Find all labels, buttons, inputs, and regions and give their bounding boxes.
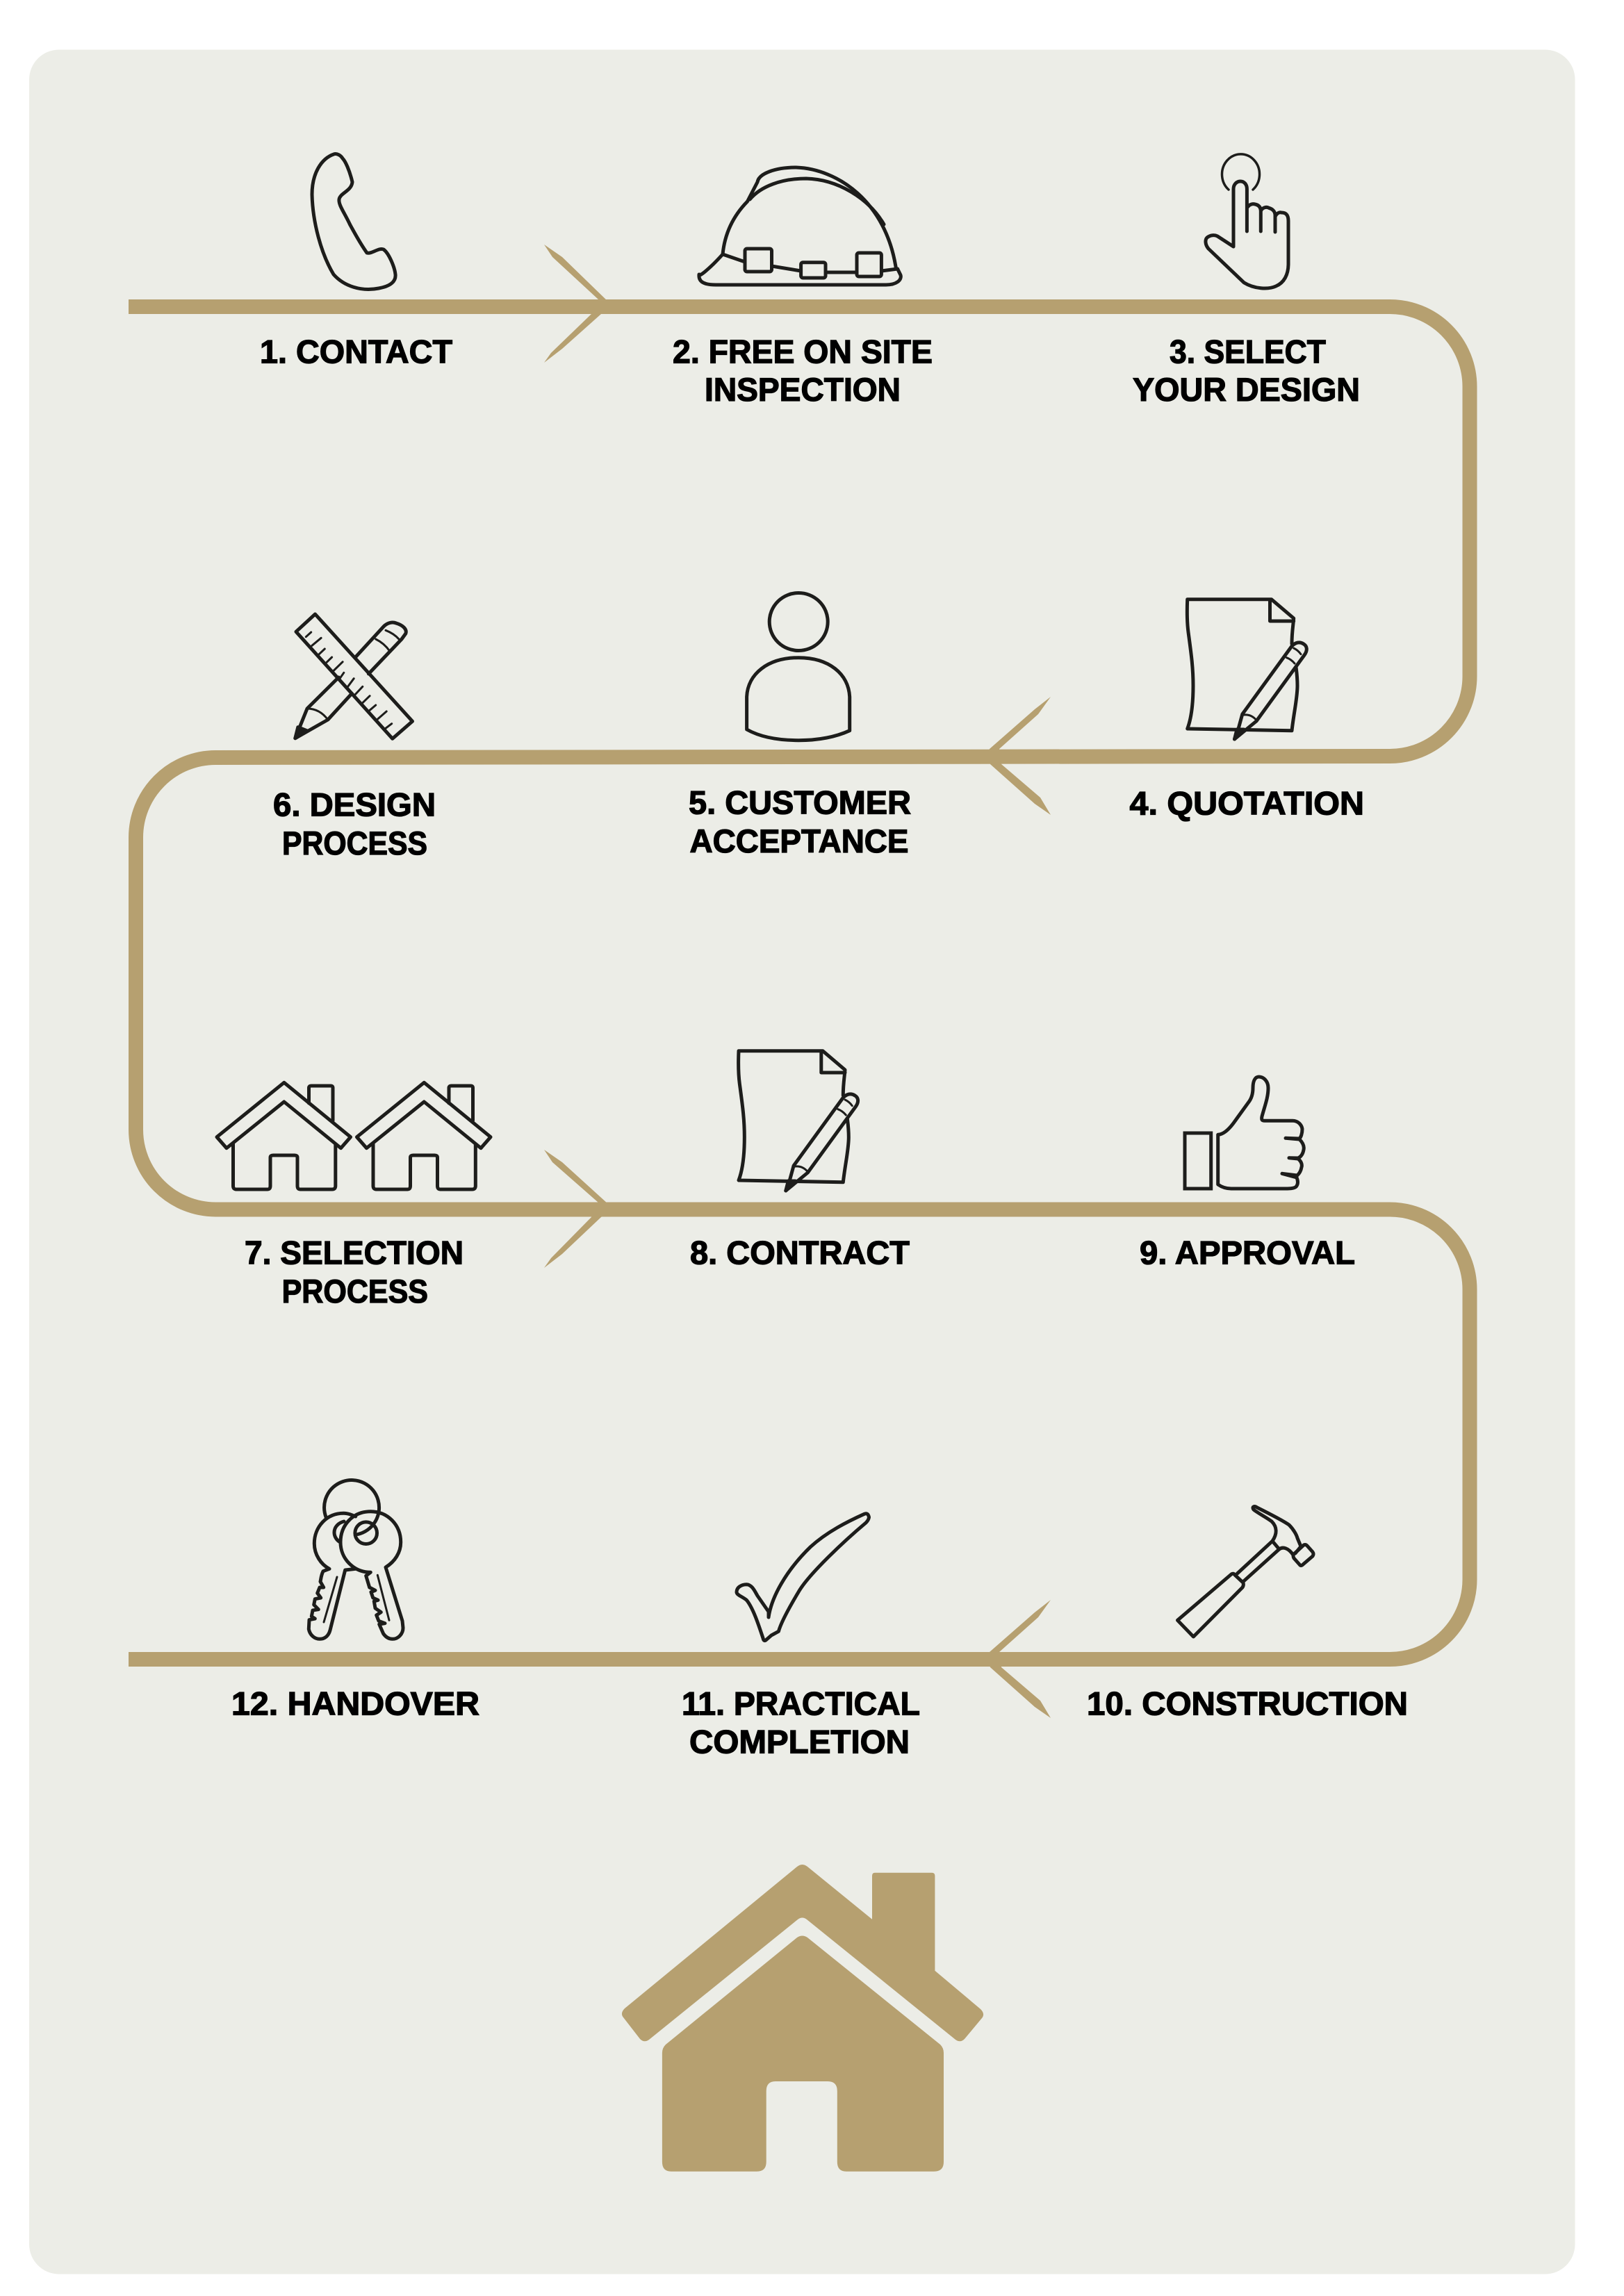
step 1: contact [260,154,452,370]
label: 7. SELECTION PROCESS: 7. SELECTION [245,1234,464,1271]
step 7: selection process [217,1082,491,1310]
label: 2. FREE ON SITE INSPECTION: INSPECTION [705,371,901,408]
label: 2. FREE ON SITE INSPECTION: 2. FREE ON SITE [673,333,933,370]
step 2: free on site inspection [673,167,933,408]
label: 5. CUSTOMER ACCEPTANCE: ACCEPTANCE [689,823,909,859]
icon: paper and pencil [1187,600,1306,739]
label: 3. SELECT YOUR DESIGN [1133,333,1360,408]
step 6: design process [273,614,436,861]
step 4: quotation [1130,600,1364,822]
step 3: select your design [1133,154,1360,408]
icon: paper and pencil [739,1051,858,1191]
label: 10. CONSTRUCTION: 10. CONSTRUCTION [1087,1685,1408,1721]
icon: check mark [737,1514,869,1641]
icon: keys [309,1480,403,1639]
step 9: approval [1140,1077,1355,1271]
label: 6. DESIGN PROCESS: PROCESS [282,825,427,861]
winding process path [129,307,1470,1659]
label: 4. QUOTATION: 4. QUOTATION [1130,785,1364,822]
label: 12. HANDOVER: 12. HANDOVER [231,1685,479,1721]
step 5: customer acceptance [689,593,911,859]
arrow: row 3 pointing right [544,1150,608,1268]
icon: house left [217,1082,350,1189]
icon: thumbs up [1185,1077,1304,1189]
arrow: row 2 pointing left [987,697,1051,815]
icon: hard hat [699,167,901,285]
label: 9. APPROVAL: 9. APPROVAL [1140,1234,1355,1271]
step 10: construction [1087,1507,1408,1721]
label: 6. DESIGN PROCESS [273,786,436,861]
label: 11. PRACTICAL COMPLETION: COMPLETION [689,1723,910,1760]
icon: pointing hand [1206,154,1288,288]
label: 3. SELECT YOUR DESIGN: 3. SELECT [1170,333,1326,370]
label: 8. CONTRACT: 8. CONTRACT [690,1234,910,1271]
label: 11. PRACTICAL COMPLETION: 11. PRACTICAL [682,1685,920,1721]
step 8: contract [690,1051,910,1271]
arrow: row 4 pointing left [987,1600,1051,1718]
icon: ruler and pencil [295,614,413,738]
label: 7. SELECTION PROCESS [245,1234,464,1310]
label: 5. CUSTOMER ACCEPTANCE [689,784,911,859]
step 12: handover [231,1480,479,1721]
arrow: row 1 pointing right [544,245,609,363]
label: 3. SELECT YOUR DESIGN: YOUR DESIGN [1133,371,1360,408]
icon: person [747,593,850,741]
step 11: practical completion [682,1514,920,1760]
label: 2. FREE ON SITE INSPECTION [673,333,933,408]
icon: telephone handset [312,154,395,289]
label: 5. CUSTOMER ACCEPTANCE: 5. CUSTOMER [689,784,911,821]
label: 6. DESIGN PROCESS: 6. DESIGN [273,786,436,823]
label: 1. CONTACT: 1. CONTACT [260,333,452,370]
label: 7. SELECTION PROCESS: PROCESS [282,1273,428,1310]
label: 11. PRACTICAL COMPLETION [682,1685,920,1760]
icon: house right [357,1082,491,1189]
icon: hammer [1177,1507,1313,1637]
icon: large gold house [622,1865,983,2172]
